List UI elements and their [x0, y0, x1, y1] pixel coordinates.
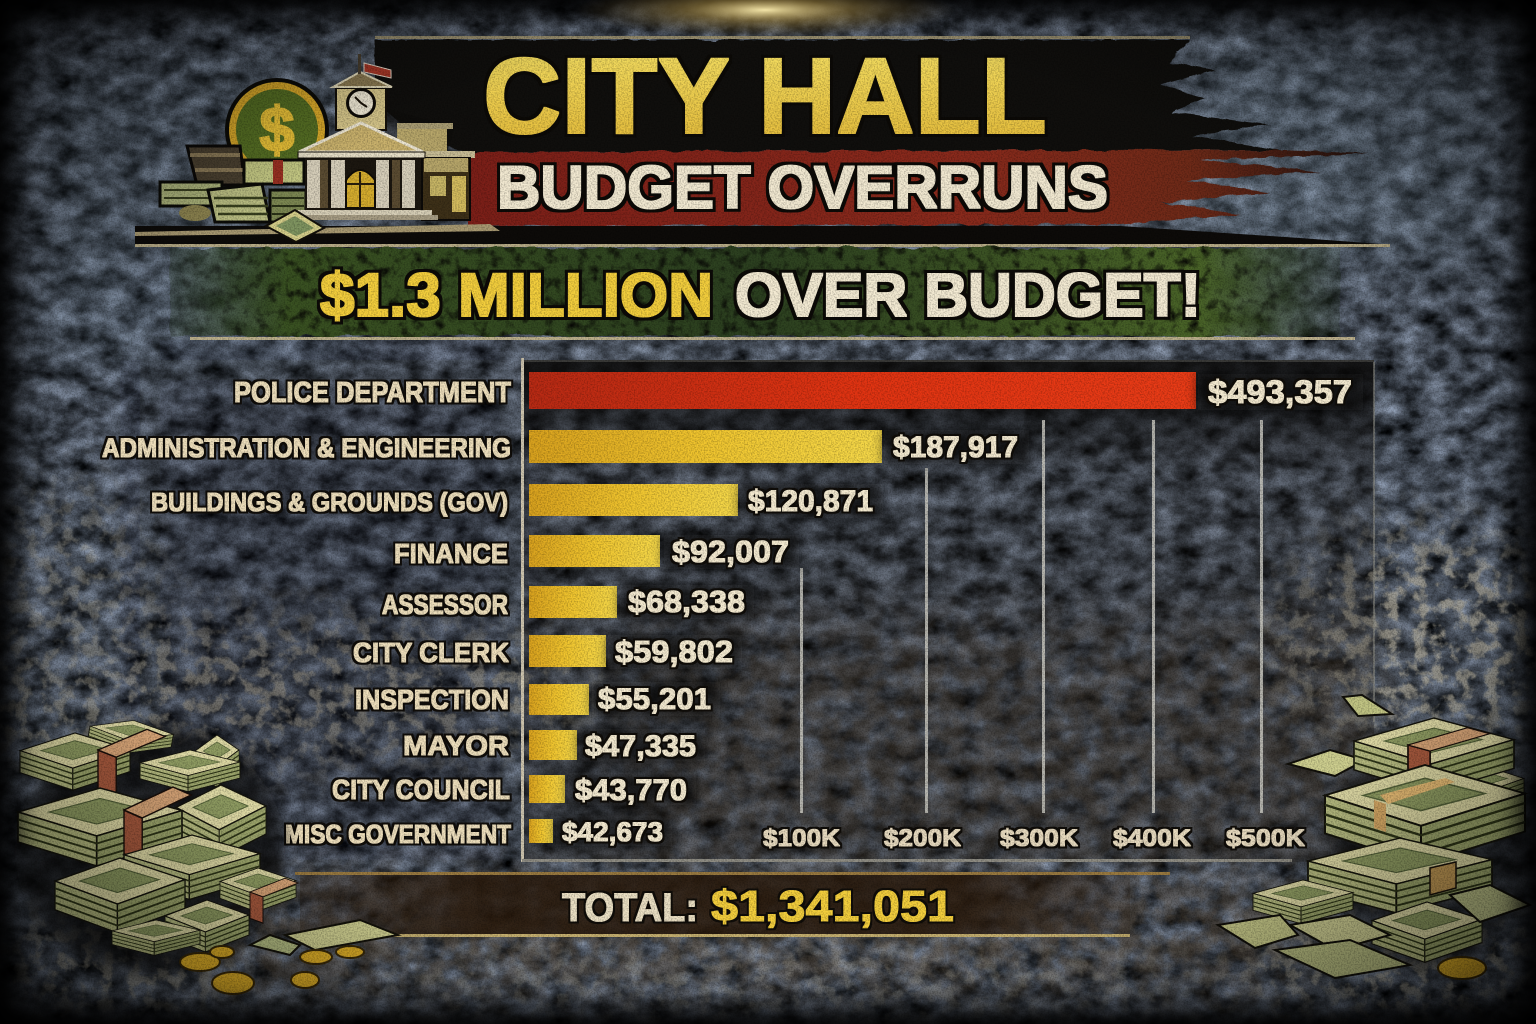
- dollar coin: [225, 78, 329, 182]
- axis tick labels: $200K: [884, 825, 962, 852]
- value backing shadows: [556, 374, 1363, 846]
- category labels: ADMINISTRATION & ENGINEERING: [102, 433, 511, 463]
- title banner: black brush stroke: [375, 36, 1280, 152]
- subtitle: Budget Overruns: BUDGET OVERRUNS: [497, 154, 1108, 221]
- headline: $1.3 million over budget: OVER BUDGET!: [735, 261, 1201, 329]
- bar: inspection: [529, 684, 589, 715]
- bar: misc government: [529, 819, 553, 843]
- bills at back: [86, 716, 175, 758]
- category labels: CITY COUNCIL: [332, 774, 510, 805]
- bars: [529, 372, 1196, 843]
- total banner: [295, 872, 1170, 937]
- bar: finance: [529, 535, 660, 567]
- headline banner: green band: [170, 248, 1355, 340]
- banded stack middle: [18, 788, 182, 866]
- value labels: $47,335: [585, 730, 696, 763]
- bar: city council: [529, 775, 565, 803]
- banded top stack: [1354, 718, 1514, 793]
- value labels: $59,802: [615, 634, 733, 669]
- bar: city clerk: [529, 635, 606, 667]
- shelf below title: [135, 224, 1390, 247]
- total banner: TOTAL:: [562, 886, 698, 930]
- loose top bill: [1343, 695, 1392, 716]
- value labels: $92,007: [672, 534, 789, 569]
- axis tick labels: $300K: [1000, 825, 1079, 852]
- category labels: ASSESSOR: [382, 589, 508, 620]
- category labels: [102, 377, 511, 849]
- value labels: $42,673: [562, 817, 663, 847]
- top glow: [575, 0, 955, 38]
- bar: police: [529, 372, 1196, 409]
- chart panel: [521, 358, 1375, 862]
- category labels: FINANCE: [394, 538, 508, 569]
- category labels: MAYOR: [403, 730, 509, 761]
- bar: buildings: [529, 484, 738, 516]
- large front stacks: [124, 835, 260, 899]
- category labels: MISC GOVERNMENT: [285, 819, 511, 849]
- value labels: $187,917: [893, 431, 1018, 464]
- banded stack top: [20, 733, 130, 790]
- value labels: $68,338: [628, 584, 745, 619]
- category labels: INSPECTION: [355, 684, 509, 715]
- clock tower: [333, 54, 392, 130]
- money pile: left: [15, 716, 398, 994]
- large front stack: [1308, 838, 1492, 913]
- money pile: right: [1218, 695, 1530, 979]
- dollar coin: $: [260, 96, 294, 165]
- bar: assessor: [529, 586, 617, 618]
- stack right: [176, 785, 266, 858]
- value labels: [562, 374, 1352, 847]
- bar: administration: [529, 430, 882, 463]
- axis tick labels: [763, 825, 1306, 852]
- right wing: [385, 108, 475, 220]
- axis tick labels: $500K: [1226, 825, 1306, 852]
- category labels: POLICE DEPARTMENT: [234, 377, 511, 409]
- gridlines: [800, 420, 1263, 813]
- banded middle stack: [1325, 765, 1525, 864]
- headline: $1.3 million over budget: [320, 261, 1201, 329]
- value labels: $120,871: [748, 485, 873, 518]
- gold coins: [180, 946, 364, 994]
- title: City Hall: CITY HALL: [483, 35, 1047, 156]
- subtitle banner: red brush stroke: [468, 150, 1370, 226]
- small cash stacks: [160, 146, 306, 222]
- value labels: $43,770: [575, 774, 687, 807]
- total banner: $1,341,051: [711, 882, 954, 931]
- loose bill: [266, 210, 324, 242]
- bar: mayor: [529, 730, 577, 760]
- pediment and columns: [292, 123, 438, 220]
- icon: city hall with dollar coin and cash: [160, 54, 475, 242]
- axis tick labels: $100K: [763, 825, 841, 852]
- category labels: CITY CLERK: [353, 637, 509, 668]
- headline: $1.3 million over budget: $1.3 MILLION: [320, 261, 713, 329]
- chart: [102, 358, 1375, 937]
- value labels: $55,201: [598, 683, 711, 716]
- axis tick labels: $400K: [1113, 825, 1192, 852]
- value labels: $493,357: [1208, 374, 1352, 410]
- category labels: BUILDINGS & GROUNDS (GOV): [151, 487, 508, 517]
